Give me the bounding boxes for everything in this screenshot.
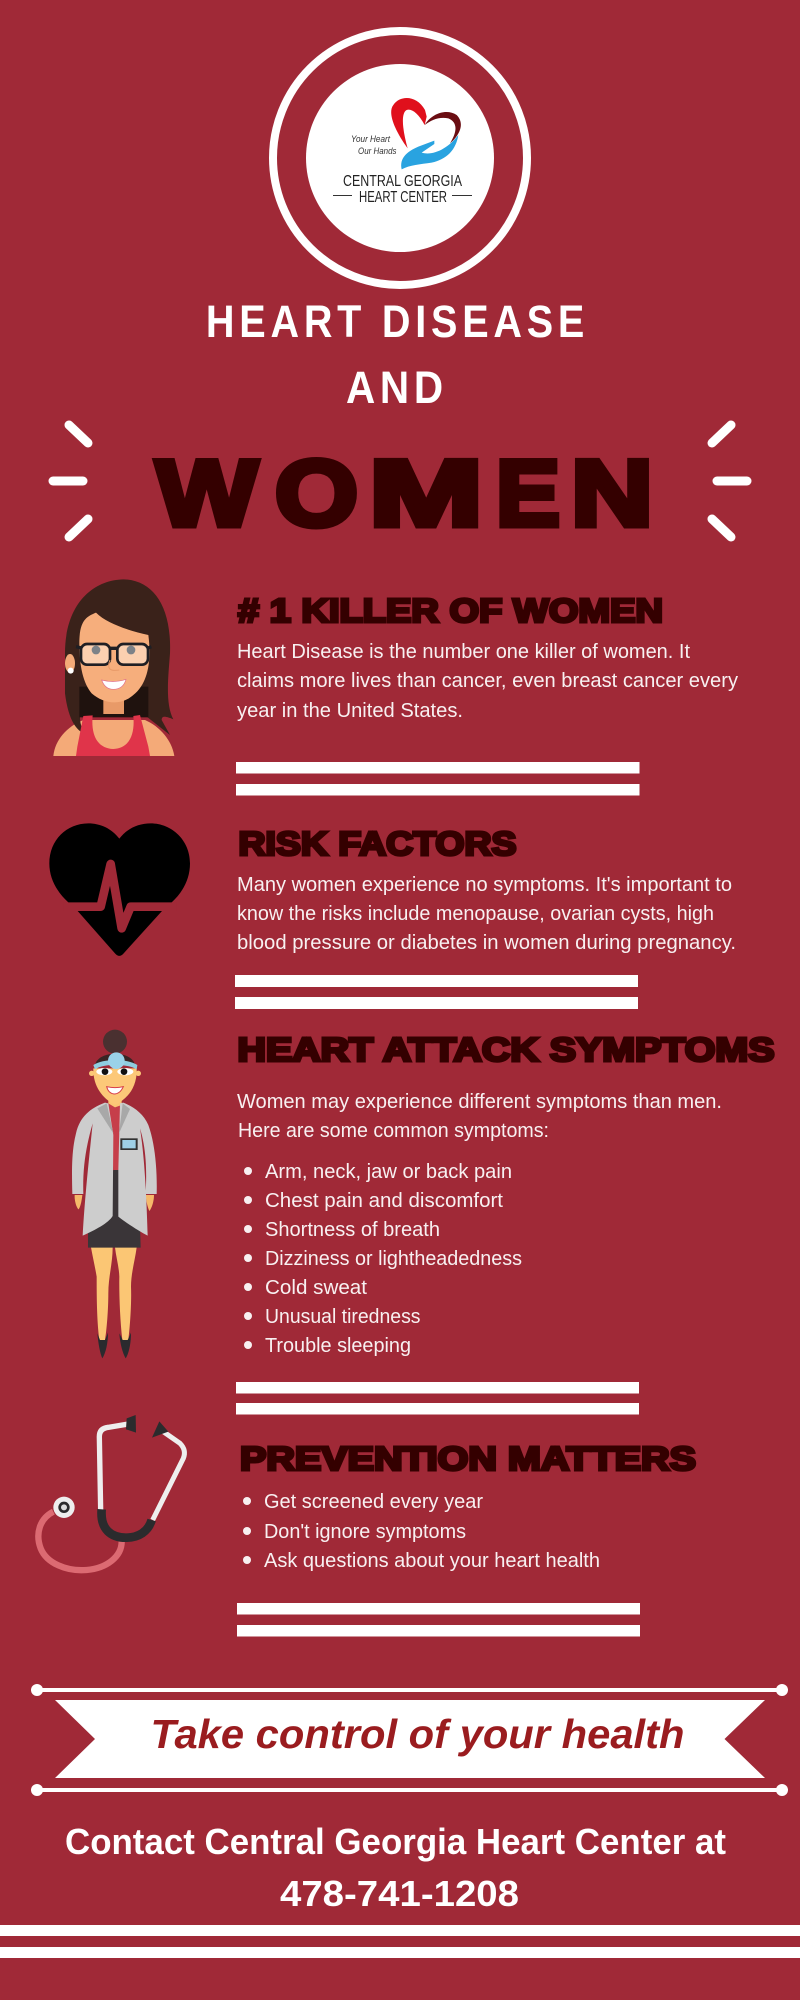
- heading: RISK FACTORS: [238, 825, 516, 862]
- body text: blood pressure or diabetes in women during pregnancy.: [237, 932, 736, 954]
- icon: heart in hand: [391, 98, 461, 169]
- title: [156, 297, 653, 546]
- logo name: [333, 173, 472, 206]
- body text: Many women experience no symptoms. It's important to: [237, 874, 732, 896]
- panel: heart attack symptoms: [72, 1030, 774, 1414]
- contact text: 478-741-1208: [280, 1873, 519, 1914]
- icon: right emphasis rays: [712, 425, 747, 537]
- panel: risk factors: [49, 823, 736, 1009]
- intro text: Women may experience different symptoms than men.: [237, 1091, 722, 1113]
- contact text: Contact Central Georgia Heart Center at: [65, 1821, 726, 1862]
- intro text: [237, 1091, 722, 1142]
- title: HEART DISEASE: [206, 297, 584, 347]
- intro text: Here are some common symptoms:: [238, 1120, 549, 1142]
- body text: Heart Disease is the number one killer of women. It: [237, 641, 690, 663]
- body text: know the risks include menopause, ovarian cysts, high: [237, 903, 714, 925]
- prevention list: Don't ignore symptoms: [264, 1521, 466, 1543]
- logo tagline: Your Heart: [351, 134, 390, 145]
- heading: # 1 KILLER OF WOMEN: [238, 592, 663, 629]
- title: O: [275, 440, 358, 546]
- callout: ribbon banner: [31, 1684, 788, 1796]
- icon: left emphasis rays: [53, 425, 88, 537]
- logo tagline: Our Hands: [358, 146, 397, 157]
- icon: doctor: [72, 1030, 157, 1358]
- heading: HEART ATTACK SYMPTOMS: [238, 1031, 774, 1068]
- prevention list: [243, 1491, 600, 1572]
- title: E: [496, 440, 560, 546]
- symptoms list: Dizziness or lightheadedness: [265, 1248, 522, 1270]
- symptoms list: Arm, neck, jaw or back pain: [265, 1161, 512, 1183]
- body text: [237, 641, 738, 722]
- body text: [237, 874, 736, 954]
- logo name: CENTRAL GEORGIA: [343, 173, 463, 190]
- contact text: [65, 1821, 726, 1914]
- prevention list: Ask questions about your heart health: [264, 1550, 600, 1572]
- title: M: [369, 440, 483, 546]
- title: N: [571, 440, 653, 546]
- body text: claims more lives than cancer, even breast cancer every: [237, 670, 738, 692]
- body text: year in the United States.: [237, 700, 463, 722]
- title: W: [156, 440, 258, 546]
- symptoms list: [244, 1161, 522, 1357]
- icon: heart with ECG line: [49, 823, 190, 956]
- panel: number one killer: [53, 579, 738, 796]
- logo badge: [273, 31, 527, 285]
- symptoms list: Chest pain and discomfort: [265, 1190, 503, 1212]
- panel: prevention matters: [38, 1415, 696, 1636]
- symptoms list: Unusual tiredness: [265, 1306, 420, 1328]
- callout text: Take control of your health: [150, 1711, 684, 1757]
- icon: woman with glasses: [53, 579, 174, 756]
- title: AND: [346, 363, 443, 414]
- icon: stethoscope: [38, 1415, 184, 1570]
- prevention list: Get screened every year: [264, 1491, 483, 1513]
- logo tagline: [351, 134, 397, 157]
- symptoms list: Trouble sleeping: [265, 1335, 411, 1357]
- heading: PREVENTION MATTERS: [240, 1440, 696, 1477]
- logo name: HEART CENTER: [359, 189, 447, 206]
- symptoms list: Cold sweat: [265, 1277, 367, 1299]
- symptoms list: Shortness of breath: [265, 1219, 440, 1241]
